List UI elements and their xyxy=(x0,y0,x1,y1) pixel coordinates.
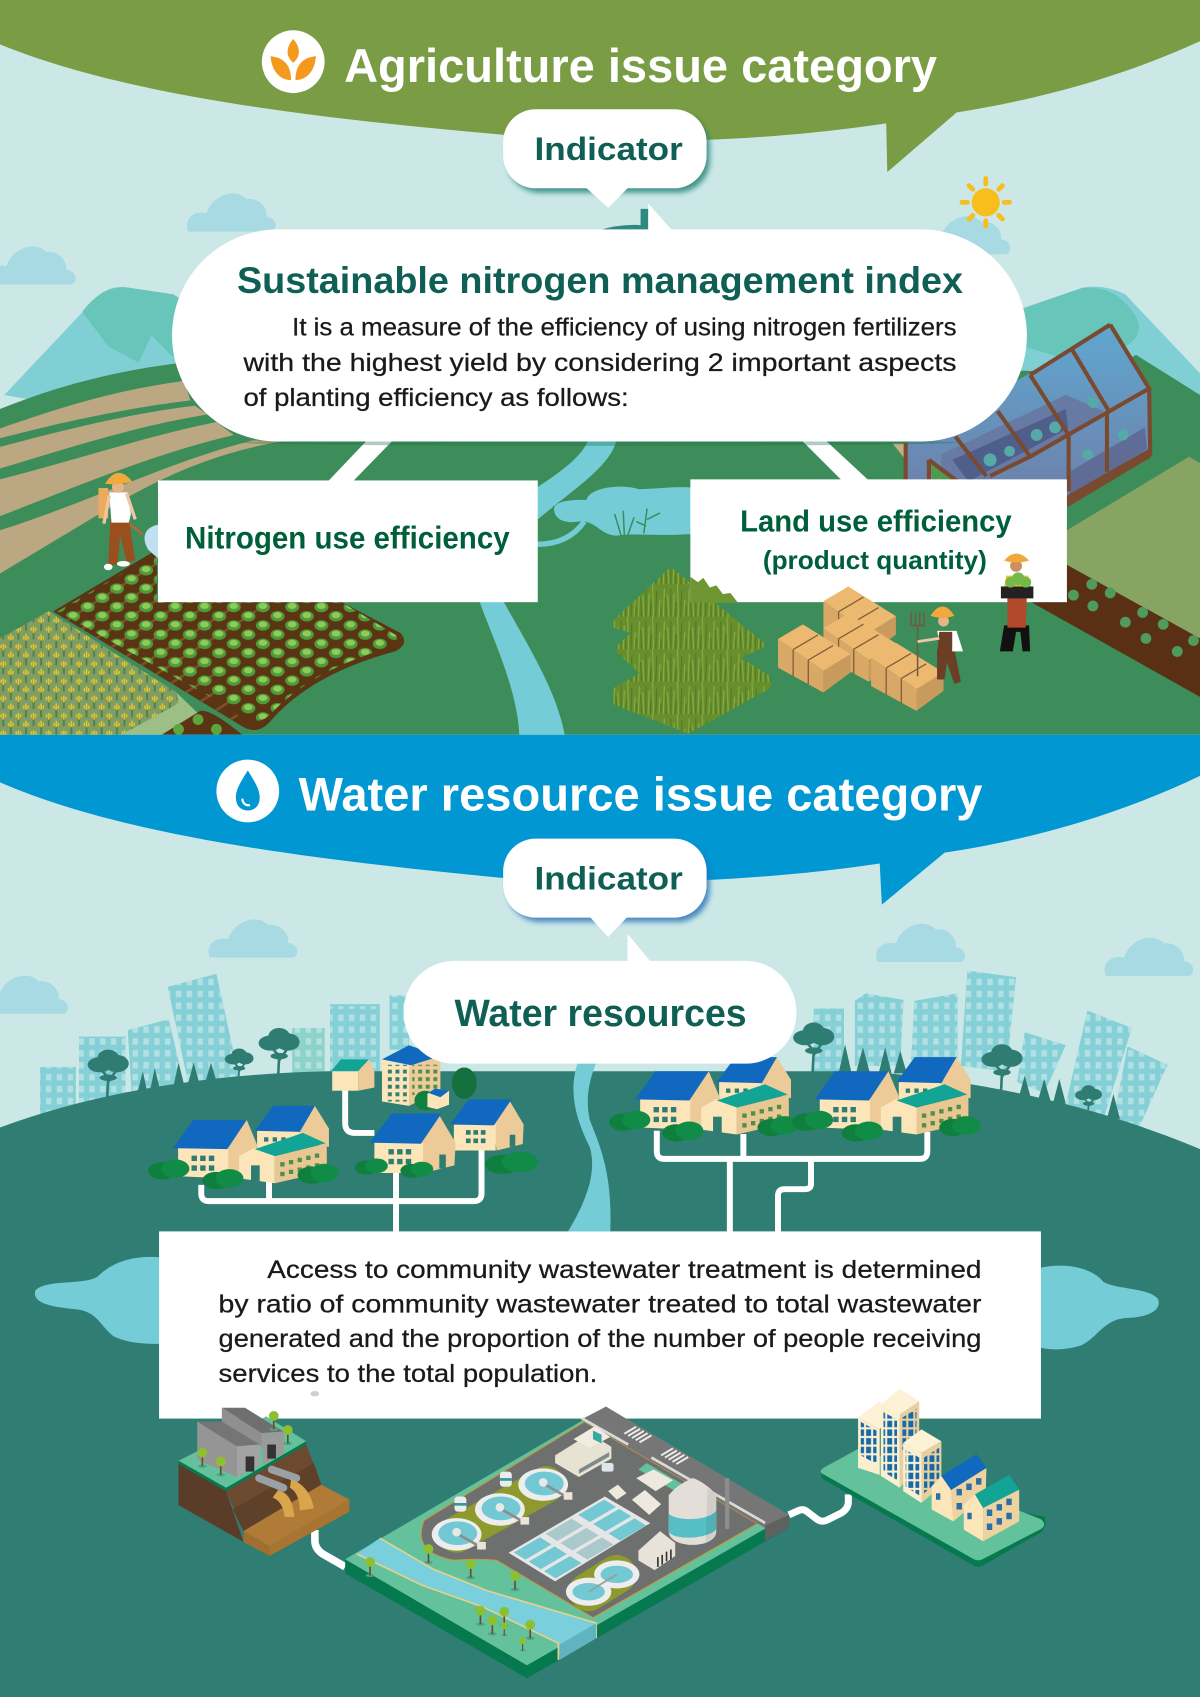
lake: right xyxy=(1039,1266,1159,1349)
text box: wastewater definition: generated and the proportion of the number of people receiving xyxy=(219,1325,981,1353)
description text: of planting efficiency as follows: xyxy=(243,384,629,412)
greenhouse xyxy=(893,325,1150,507)
factory on hillside xyxy=(179,1408,350,1556)
sewer pipes: right community xyxy=(657,1131,927,1234)
heading: agriculture issue category: Agriculture issue category xyxy=(344,40,938,93)
text box: wastewater definition: Access to community wastewater treatment is determined xyxy=(267,1256,981,1284)
plant trees xyxy=(365,1544,535,1651)
bubble: indicator (water) xyxy=(503,839,710,937)
clouds: agriculture sky xyxy=(0,193,1010,285)
stack xyxy=(725,1478,729,1529)
sewer pipes: left community xyxy=(201,1087,482,1234)
farmer holding cabbage tray xyxy=(1000,553,1033,651)
city block xyxy=(821,1389,1045,1567)
wheat field xyxy=(0,611,201,736)
river: water section xyxy=(568,1063,611,1231)
skyline: right xyxy=(793,971,1168,1134)
clouds: water sky xyxy=(0,919,1193,1014)
bubble tail teal accent xyxy=(598,209,649,230)
white connectors from bubble xyxy=(327,439,871,483)
river on plant base xyxy=(357,1538,596,1660)
bubble: indicator (water): Indicator xyxy=(535,860,683,896)
indicator title: Sustainable nitrogen management index xyxy=(237,260,964,301)
pipe: factory to plant xyxy=(315,1530,345,1567)
mountains xyxy=(4,287,1200,406)
box: nitrogen use efficiency: Nitrogen use efficiency xyxy=(185,521,510,556)
text box: wastewater definition: services to the total population. xyxy=(219,1360,597,1388)
text box: wastewater definition: by ratio of community wastewater treated to total wastewater xyxy=(219,1291,981,1319)
road curbs and verges xyxy=(582,1418,765,1523)
icon: sun xyxy=(962,179,1010,226)
boiler house xyxy=(638,1531,675,1570)
page background: water sky xyxy=(0,735,1200,1168)
heading: water resource issue category: Water resource issue category xyxy=(299,768,983,821)
plant base xyxy=(345,1407,789,1678)
farmer with pitchfork xyxy=(911,606,963,684)
banner: water resource xyxy=(0,735,1200,905)
icon: wheat xyxy=(262,30,325,93)
farmer spraying field xyxy=(98,473,158,570)
road xyxy=(581,1407,789,1528)
ground: water section xyxy=(0,1071,1200,1697)
text box: wastewater definition xyxy=(159,1231,1041,1419)
road crosswalks xyxy=(624,1427,688,1464)
box: land use efficiency: Land use efficiency xyxy=(740,505,1012,538)
rice tips overlapping box xyxy=(690,577,738,603)
description text xyxy=(242,313,957,412)
small utility buildings xyxy=(608,1469,673,1515)
box: nitrogen use efficiency xyxy=(158,480,538,602)
concrete yard xyxy=(421,1422,757,1618)
wastewater treatment plant xyxy=(345,1407,789,1678)
cabbage field xyxy=(53,550,404,730)
bubble: sustainable nitrogen management index xyxy=(172,203,1027,446)
pond with reeds xyxy=(554,487,703,536)
houses: upper cluster with apartment xyxy=(331,1045,477,1110)
icon: water drop xyxy=(216,760,279,822)
stacked cardboard boxes xyxy=(778,586,944,711)
lake: left xyxy=(35,1257,162,1344)
houses: right community xyxy=(609,1057,980,1142)
clarifier olive bed xyxy=(457,1485,546,1534)
rectangular settling tanks xyxy=(509,1496,650,1581)
bubble: indicator (agriculture): Indicator xyxy=(535,131,683,167)
block base xyxy=(821,1472,1045,1567)
pipe: plant to city xyxy=(789,1494,848,1521)
towers xyxy=(858,1389,941,1503)
administration building xyxy=(555,1426,614,1477)
brown vegetable strip xyxy=(1032,565,1200,697)
skyline: left xyxy=(40,974,409,1116)
banner: agriculture xyxy=(0,0,1200,172)
small brown plot xyxy=(160,711,243,736)
clarifiers xyxy=(432,1468,572,1551)
small tanks xyxy=(454,1472,512,1512)
bubble: water resources: Water resources xyxy=(454,993,747,1035)
olive field xyxy=(1067,457,1200,638)
land: agriculture ground xyxy=(0,355,1200,736)
box: land use efficiency xyxy=(690,479,1067,602)
description text: It is a measure of the efficiency of using nitrogen fertilizers xyxy=(292,313,957,341)
bubble: water resources xyxy=(404,934,796,1064)
digester cylinder xyxy=(669,1478,716,1545)
oval tanks xyxy=(566,1560,639,1606)
end block xyxy=(765,1515,789,1541)
houses: left community xyxy=(148,1099,538,1189)
houses xyxy=(932,1454,1019,1541)
page background: agriculture sky xyxy=(0,0,1200,736)
description text: with the highest yield by considering 2 important aspects xyxy=(242,349,957,377)
terraced fields xyxy=(0,381,281,573)
bubble: indicator (agriculture) xyxy=(503,109,710,208)
river: agriculture xyxy=(477,438,617,736)
rice field xyxy=(614,567,770,734)
box: land use efficiency: (product quantity) xyxy=(763,545,987,575)
